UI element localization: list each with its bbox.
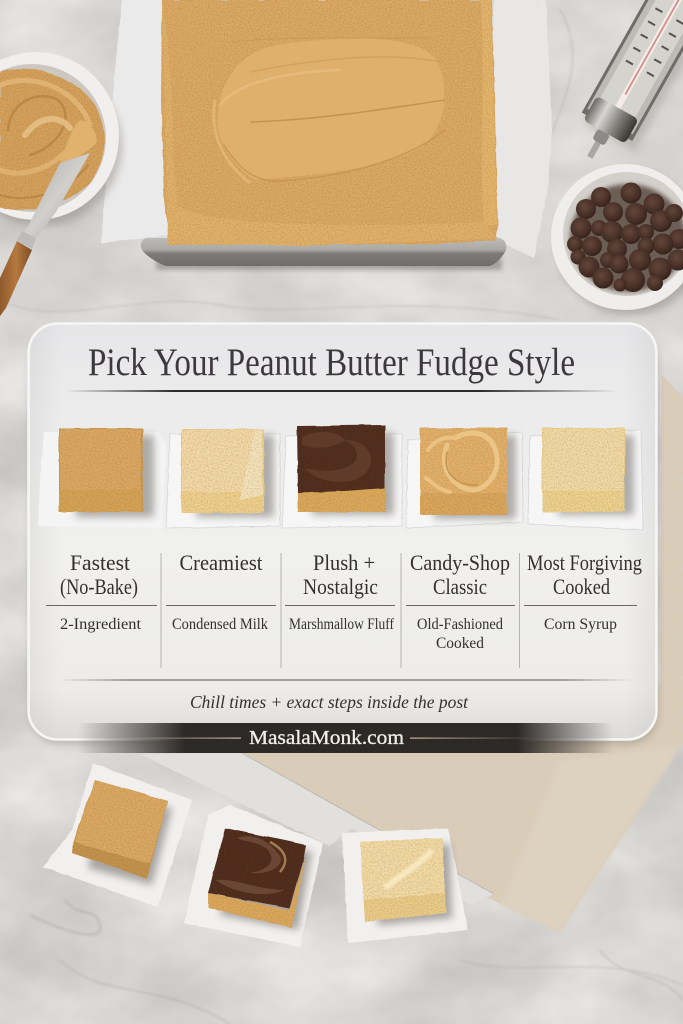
fudge square: 2-ingredient [59, 428, 154, 517]
column heading: most forgiving cooked: Cooked [553, 574, 610, 599]
thermometer collar [592, 129, 610, 146]
parchment squares row [38, 430, 643, 530]
thermometer steel cap [583, 96, 639, 144]
fudge surface [161, 0, 498, 246]
column heading: creamiest: Creamiest [180, 550, 262, 575]
white bowl [0, 52, 119, 220]
method label: marshmallow fluff: Marshmallow Fluff [289, 616, 395, 633]
column heading: candy-shop classic: Classic [433, 574, 487, 599]
bowl of peanut butter with spatula [0, 52, 122, 316]
brand banner [78, 723, 613, 753]
fudge square: corn syrup [542, 428, 634, 515]
thermometer body [582, 0, 683, 141]
bowl shadow [0, 66, 122, 226]
brand banner: MasalaMonk.com [249, 728, 404, 749]
baking pan of peanut butter fudge [101, 0, 552, 270]
card shadow [30, 330, 658, 744]
peanut butter glob [60, 120, 97, 162]
panel: fudge style card [28, 324, 658, 753]
pan shadow [156, 258, 502, 270]
column heading: fastest [60, 550, 138, 599]
plated fudge: no-bake square on paper [43, 763, 192, 907]
column heading: most forgiving cooked [527, 550, 642, 599]
column heading: fastest: (No-Bake) [60, 574, 138, 599]
column heading: candy-shop classic: Candy-Shop [410, 550, 510, 575]
column heading: most forgiving cooked: Most Forgiving [527, 550, 642, 575]
footer note: Chill times + exact steps inside the post [190, 692, 469, 712]
spatula ferrule [17, 231, 36, 249]
swirl in fudge [214, 38, 445, 183]
column heading: candy-shop classic [410, 550, 510, 599]
peanut butter [0, 69, 104, 210]
column heading: plush + nostalgic: Plush + [313, 550, 375, 575]
white bowl [551, 164, 683, 310]
chocolate chips [567, 182, 683, 292]
candy thermometer [565, 0, 683, 175]
column heading: plush + nostalgic [303, 550, 378, 599]
method label: old-fashioned cooked [417, 616, 503, 652]
bowl of chocolate chips [551, 164, 683, 315]
parchment liner left [101, 0, 168, 243]
fudge square: old-fashioned cooked [420, 428, 516, 519]
method label: 2-ingredient: 2-Ingredient [60, 616, 142, 633]
thermometer shadow [584, 0, 683, 151]
parchment liner right [486, 0, 552, 258]
method label: old-fashioned cooked: Old-Fashioned [417, 616, 503, 633]
method label: old-fashioned cooked: Cooked [436, 635, 484, 652]
method label: corn syrup: Corn Syrup [544, 616, 617, 633]
bowl shadow [556, 171, 683, 315]
card body [28, 324, 656, 740]
method label: condensed milk: Condensed Milk [172, 616, 268, 633]
fudge square: marshmallow fluff [297, 425, 394, 515]
column heading: fastest: Fastest [70, 550, 130, 575]
spatula wooden handle [0, 241, 32, 316]
spatula blade [25, 153, 90, 238]
plated fudge: vanilla cream square on paper [342, 828, 468, 943]
metal pan rim [141, 238, 506, 266]
thermometer tip [587, 130, 607, 159]
column heading: plush + nostalgic: Nostalgic [303, 574, 378, 599]
title: Pick Your Peanut Butter Fudge Style [88, 341, 575, 384]
plated fudge: marshmallow swirl square on paper [184, 805, 323, 947]
parchment sheet under the card [140, 375, 683, 932]
thermometer glass tube [614, 0, 683, 111]
title rule [65, 390, 617, 392]
fudge square: condensed milk [181, 429, 274, 517]
